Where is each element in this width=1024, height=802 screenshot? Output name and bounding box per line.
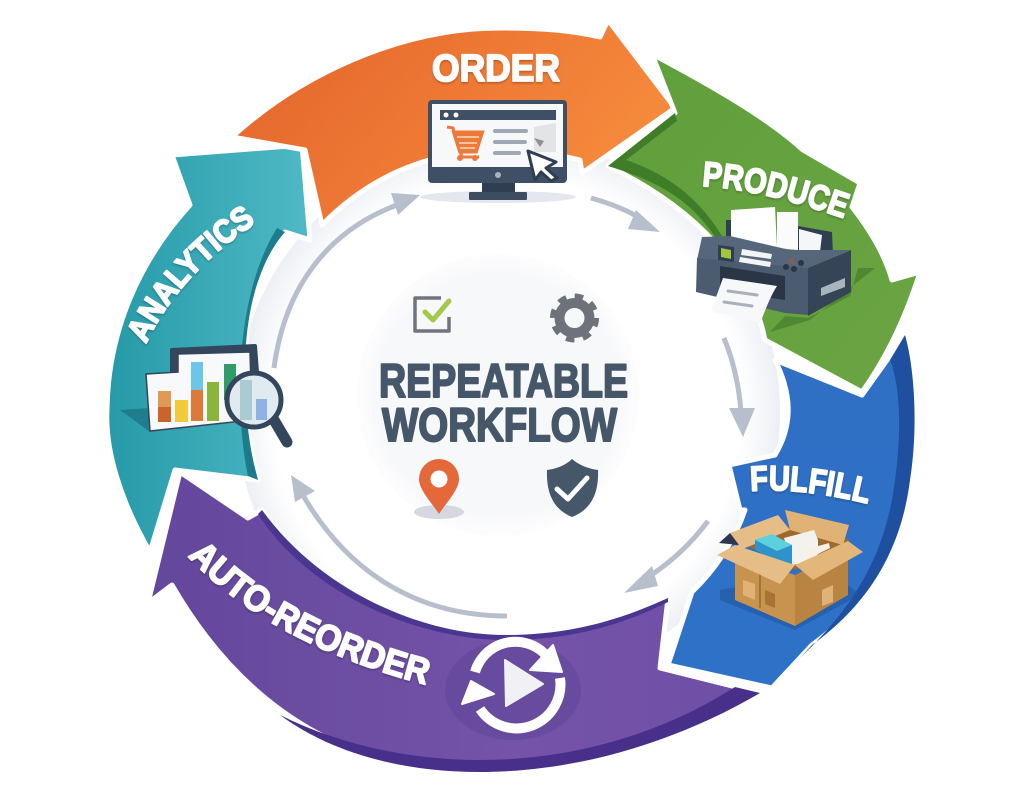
panel: analytics arrow [109, 148, 312, 546]
icon: location pin [414, 459, 464, 519]
panel: fulfill arrow [671, 335, 915, 686]
icon: checkbox [415, 298, 449, 331]
arrow: fulfill to auto-reorder [624, 521, 708, 593]
icon: cursor [528, 151, 557, 181]
icon: shopping cart [447, 127, 484, 161]
label: order: ORDER [432, 48, 560, 90]
printed sheet [711, 278, 777, 323]
arrow: order to produce [591, 198, 660, 232]
icon: cardboard box [717, 510, 863, 630]
arrow: analytics to order [274, 193, 420, 368]
arrow: auto-reorder to analytics [291, 475, 507, 616]
title [379, 354, 628, 451]
box contents [755, 530, 830, 566]
panel: order arrow [232, 20, 675, 225]
inner disc background [236, 140, 780, 684]
title: WORKFLOW [382, 398, 618, 451]
panel: produce arrow [606, 60, 916, 388]
printer paper stack [726, 207, 833, 254]
icon: printer [696, 207, 875, 332]
icon: monitor with cart [420, 100, 576, 203]
center disc [357, 254, 639, 536]
label: analytics: ANALYTICS [128, 206, 254, 346]
label: auto-reorder: AUTO-REORDER [187, 544, 430, 688]
icon: shield [547, 459, 598, 517]
icon: repeat play [445, 640, 581, 740]
title: REPEATABLE [379, 354, 628, 407]
magnifier [227, 373, 287, 442]
label: produce: PRODUCE [702, 161, 852, 220]
icon: gear [554, 297, 596, 339]
panel: auto-reorder arrow [152, 476, 760, 772]
label: fulfill: FULFILL [750, 465, 870, 506]
icon: analytics chart with magnifier [120, 346, 287, 442]
arrow: produce to fulfill [724, 338, 755, 437]
